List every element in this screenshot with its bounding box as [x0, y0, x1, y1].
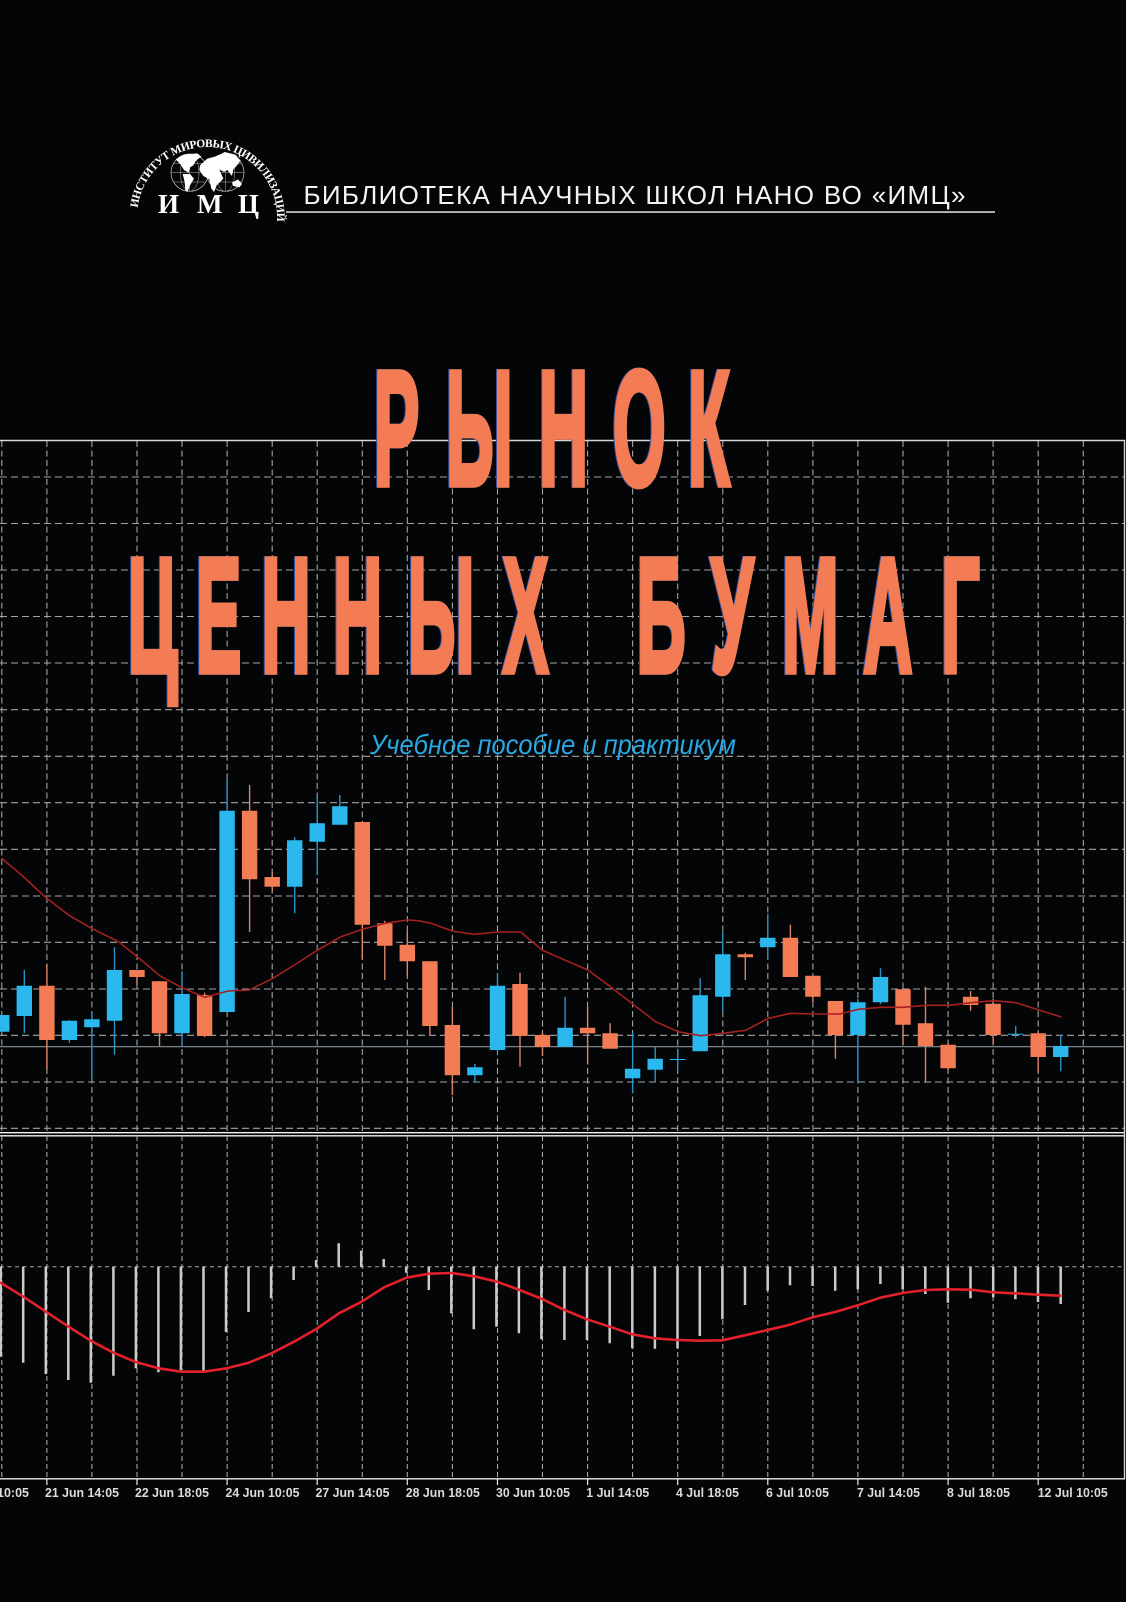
time axis labels: 12 Jul 10:05 — [1038, 1485, 1108, 1500]
oscillator panel — [0, 1136, 1124, 1479]
subtitle: Учебное пособие и практикум — [369, 729, 736, 760]
time axis labels — [0, 1485, 1108, 1500]
logo arc text: ИНСТИТУТ МИРОВЫХ ЦИВИЛИЗАЦИЙ — [130, 140, 287, 222]
time axis labels: 4 Jul 18:05 — [676, 1485, 739, 1500]
title line 1: РЫНОК — [374, 338, 730, 520]
moving average line — [2, 858, 1061, 1036]
time axis labels: 6 Jul 10:05 — [766, 1485, 829, 1500]
blue candles — [0, 778, 1068, 1093]
candlestick chart — [0, 778, 1068, 1095]
price chart grid — [0, 440, 1124, 1479]
time axis labels: 24 Jun 10:05 — [226, 1485, 300, 1500]
time axis labels: 7 Jul 14:05 — [857, 1485, 920, 1500]
time axis labels: 30 Jun 10:05 — [496, 1485, 570, 1500]
series heading: БИБЛИОТЕКА НАУЧНЫХ ШКОЛ НАНО ВО «ИМЦ» — [304, 180, 966, 210]
logo: institute emblem — [130, 140, 287, 222]
logo letters: И М Ц — [158, 189, 259, 219]
time axis labels: 8 Jul 18:05 — [947, 1485, 1010, 1500]
time axis — [0, 1479, 1125, 1500]
orange candles — [39, 785, 1046, 1095]
histogram bars — [1, 1243, 1061, 1383]
time axis labels: 27 Jun 14:05 — [316, 1485, 390, 1500]
time axis labels: 1 Jul 14:05 — [586, 1485, 649, 1500]
time axis labels: 28 Jun 18:05 — [406, 1485, 480, 1500]
title — [128, 338, 980, 707]
heading underline — [286, 211, 995, 213]
time axis labels: 21 Jun 14:05 — [45, 1485, 119, 1500]
icon: twin globes — [171, 152, 244, 192]
signal line — [0, 1273, 1061, 1372]
time axis labels: 22 Jun 18:05 — [135, 1485, 209, 1500]
title line 2: ЦЕННЫХ БУМАГ — [128, 525, 980, 707]
